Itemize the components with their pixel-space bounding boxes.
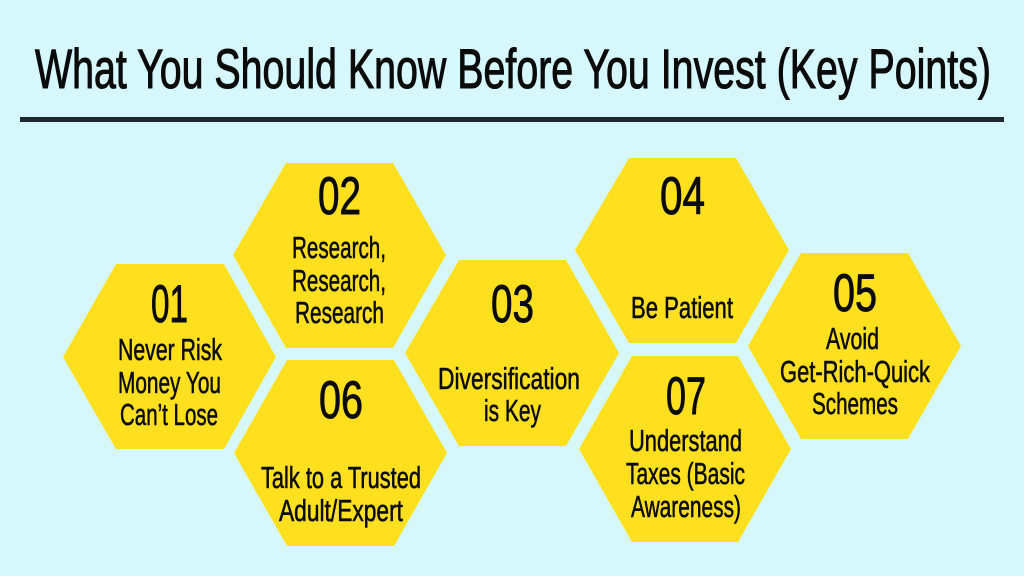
hexagon 06: Talk to a Trusted Adult/Expert: Talk to a Trusted [261, 460, 421, 495]
hexagon 05: Avoid Get-Rich-Quick Schemes: Schemes [812, 386, 898, 421]
title divider line [20, 117, 1004, 122]
hexagon 02: Research, Research, Research: 02 [318, 167, 361, 226]
hexagon 02: Research, Research, Research [233, 163, 446, 348]
hexagon 03: Diversification is Key: 03 [491, 275, 534, 334]
hexagon 02: Research, Research, Research: Research, [292, 263, 386, 298]
hexagon 05: Avoid Get-Rich-Quick Schemes: 05 [833, 264, 877, 323]
hexagon 07: Understand Taxes (Basic Awareness): Understand [629, 423, 742, 458]
hexagon 06: Talk to a Trusted Adult/Expert [234, 360, 447, 546]
hexagon 04: Be Patient [575, 158, 789, 343]
hexagon 02: Research, Research, Research: Research, [292, 230, 386, 265]
hexagon 03: Diversification is Key: Diversification [438, 361, 580, 396]
hexagon 05: Avoid Get-Rich-Quick Schemes: Get-Rich-Quick [780, 354, 930, 389]
hexagon 01: Never Risk Money You Can't Lose: Money You [118, 365, 221, 400]
hexagon 03: Diversification is Key [405, 260, 619, 446]
hexagon 07: Understand Taxes (Basic Awareness): 07 [666, 367, 706, 426]
hexagon 02: Research, Research, Research: Research [295, 295, 384, 330]
hexagon 01: Never Risk Money You Can't Lose [63, 264, 276, 449]
hexagon 07: Understand Taxes (Basic Awareness): Awareness) [631, 489, 741, 524]
hexagon 06: Talk to a Trusted Adult/Expert: 06 [319, 371, 363, 430]
hexagon 01: Never Risk Money You Can't Lose: 01 [151, 275, 188, 334]
hexagon 06: Talk to a Trusted Adult/Expert: Adult/Expert [279, 493, 403, 528]
hexagon 04: Be Patient: Be Patient [631, 290, 733, 325]
hexagon 05: Avoid Get-Rich-Quick Schemes [748, 253, 961, 439]
hexagon 07: Understand Taxes (Basic Awareness) [579, 356, 791, 542]
hexagon 04: Be Patient: 04 [660, 167, 705, 226]
hexagon 07: Understand Taxes (Basic Awareness): Taxes (Basic [626, 456, 745, 491]
hexagon 01: Never Risk Money You Can't Lose: Can’t Lose [120, 397, 218, 432]
hexagon 01: Never Risk Money You Can't Lose: Never Risk [118, 332, 222, 367]
hexagon 03: Diversification is Key: is Key [484, 393, 541, 428]
hexagon 05: Avoid Get-Rich-Quick Schemes: Avoid [826, 321, 879, 356]
